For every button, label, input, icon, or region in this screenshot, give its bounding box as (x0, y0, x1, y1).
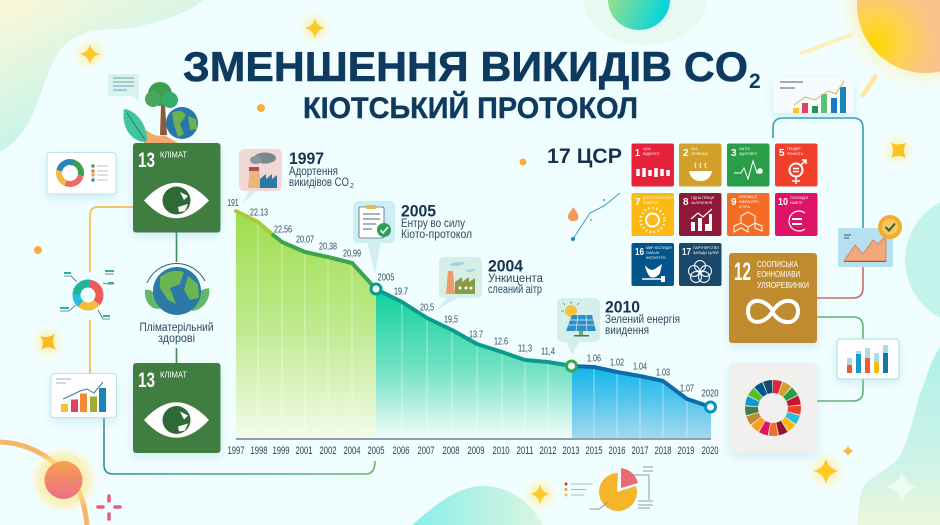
SDG tile 10 (775, 193, 818, 236)
SDG tile 3: ЗДОРОВ'Я (739, 152, 757, 156)
data value labels: 22,56 (274, 224, 292, 236)
description (401, 218, 472, 241)
SDG tile 10: НАВІТЕ (790, 201, 803, 205)
x axis labels: 2001 (296, 445, 312, 457)
card label: КЛІМАТ (160, 370, 187, 380)
icon: pie chart with legend (564, 467, 653, 511)
data value labels: 2020 (702, 388, 719, 400)
data value labels: 12.6 (494, 336, 508, 348)
data value labels: 19,5 (444, 314, 458, 326)
year: 2005 (401, 202, 436, 220)
data value labels: 20,5 (420, 302, 434, 314)
decorative blob: top left (0, 0, 203, 152)
SDG tile 2 (679, 144, 722, 186)
connector: green vertical (176, 232, 178, 363)
year: 2010 (605, 298, 640, 316)
globe caption: здорові (158, 333, 195, 345)
data value labels: 191 (228, 197, 239, 209)
SDG tile 5: РІВНІСТЬ (787, 152, 804, 156)
x axis labels: 2006 (392, 445, 410, 457)
SDG tile 8: ЗАЛУЧЕННЯ (691, 201, 713, 205)
area: green 1997-2005 (236, 211, 376, 438)
marker: 2005 (371, 284, 381, 294)
x axis labels (228, 445, 718, 457)
SDG tile 8: ГІДНА ПРАЦЯ (691, 196, 715, 200)
x axis labels: 2004 (344, 445, 360, 457)
description: Ентру во силу (401, 218, 465, 230)
connector: blue-green bottom (104, 417, 375, 474)
SDG tile 9: ІНФРАСТРУ- (739, 200, 761, 204)
SDG tile 9 (727, 193, 770, 236)
SDG tile 9: 9 (731, 197, 737, 208)
icon: eye with globe (144, 402, 209, 438)
data value labels: 1.06 (587, 352, 601, 364)
title: ЗМЕНШЕННЯ ВИКИДІВ CO (183, 43, 748, 90)
SDG tile 7: 7 (635, 197, 641, 208)
x axis labels: 2002 (320, 445, 336, 457)
x axis (236, 438, 711, 440)
SDG tile 9: ІННОВАЦІЇ (739, 195, 757, 199)
SDG tile 17 (679, 243, 722, 286)
panel: SDG wheel (729, 363, 817, 453)
SDG tile 5: 5 (779, 148, 785, 159)
year: 1997 (289, 149, 324, 168)
card: area chart with badge (838, 215, 902, 267)
line: teal (376, 289, 572, 366)
SDG tile 8 (679, 193, 722, 236)
x axis labels: 2008 (442, 445, 460, 457)
x axis labels: 2016 (608, 445, 626, 457)
SDG tile 17: 17 (682, 247, 691, 258)
line: green (236, 211, 272, 234)
description (289, 166, 354, 190)
marker: 2020 (706, 402, 716, 412)
area: teal 2005-2013 (376, 289, 572, 438)
icon: solar panel and sun (557, 298, 600, 355)
data value labels: 19.7 (394, 286, 408, 298)
description: Адортення (289, 166, 338, 178)
description: виидення (605, 325, 649, 337)
decorative blob: top centre (583, 0, 707, 45)
icon: factory with clean air (437, 257, 482, 310)
data value labels: 2005 (378, 272, 395, 284)
SDG tile 16: СИЛЬНІ (646, 251, 659, 255)
icon: document with check (353, 201, 395, 275)
description: 2 (350, 183, 354, 190)
panel: SDG grid (632, 144, 818, 286)
card label: КЛІМАТ (160, 150, 187, 160)
SDG tile 7: ДОСТУПНА ЕНЕРГІЯ (643, 196, 679, 200)
SDG tile 10: ОСКЛАДНІ (790, 196, 808, 200)
icon: check badge (878, 215, 902, 239)
card number: 12 (734, 258, 751, 286)
x axis labels: 2019 (678, 445, 694, 457)
callout: 1997 (239, 149, 354, 205)
panel: climate card bottom (133, 363, 220, 453)
SDG tile 3 (727, 144, 770, 186)
heading: 17 SDGs: 17 ЦСР (547, 145, 622, 168)
card: bar chart left (51, 374, 116, 418)
description: Зелений енергія (605, 314, 680, 326)
x axis labels: 2013 (562, 445, 580, 457)
data value labels: 1.04 (633, 360, 647, 372)
x axis labels: 2009 (468, 445, 484, 457)
description: Ункицента (488, 273, 544, 285)
icon: hand with tree, leaf and globe (124, 82, 198, 143)
SDG tile 2: 2 (683, 148, 689, 159)
description: слеаний аітр (488, 284, 542, 296)
connector: right red (817, 267, 863, 298)
decorative sun: bottom left (0, 442, 98, 525)
icon: donut with callouts (60, 271, 114, 319)
SDG tile 17: ЗАРАДИ ЦІЛЕЙ (693, 251, 719, 255)
marker: 2013 (566, 361, 576, 371)
SDG tile 5: ҐЕНДЕР (787, 146, 801, 151)
x axis labels: 2007 (418, 445, 434, 457)
description (488, 273, 544, 296)
title: 2 (749, 70, 761, 93)
globe caption (140, 322, 214, 345)
decorative blob: bottom centre (412, 486, 543, 525)
SDG tile 2: ЇЖА (691, 147, 698, 151)
area: blue 2013-2020 (572, 366, 711, 438)
data value labels: 1.03 (656, 366, 670, 378)
connector: right green (817, 317, 863, 401)
data value labels: 11,3 (518, 342, 532, 354)
x axis labels: 2015 (586, 445, 602, 457)
SDG tile 16: ІНСТИТУТИ (646, 256, 666, 260)
description: викидівов CO (289, 177, 349, 189)
icon: infinity loop (748, 301, 798, 322)
x axis labels: 1999 (272, 445, 290, 457)
data value labels: 13.7 (469, 328, 483, 340)
x axis labels: 2018 (654, 445, 672, 457)
SDG tile 1: 1 (635, 148, 640, 159)
decorative sun: top right (802, 0, 940, 95)
data value labels: 22.13 (250, 206, 268, 218)
icon: speech bubble (108, 74, 139, 101)
callout: 2005 (353, 201, 472, 275)
x axis labels: 1998 (250, 445, 268, 457)
SDG tile 8: 8 (683, 197, 689, 208)
description (605, 314, 680, 337)
area chart (228, 197, 719, 457)
card text: УЛЯОРЕВИНКИ (757, 280, 809, 290)
card text: СООПИСЬКА (757, 259, 798, 269)
SDG tile 16: МИР, ЮСТИЦІЯ (646, 246, 672, 250)
SDG tile 7 (632, 193, 679, 236)
SDG tile 1: БІДНОСТІ (643, 152, 659, 156)
SDG tile 1 (632, 144, 674, 186)
SDG tile 7: ЕНЕРГІЯ (643, 201, 658, 205)
globe caption: Пліматерільний (140, 322, 214, 334)
icon: globe with leaves (145, 263, 209, 315)
panel: SDG 12 card (729, 253, 817, 343)
card number: 13 (138, 369, 155, 392)
card text (757, 259, 809, 290)
subtitle: КІОТСЬКИЙ ПРОТОКОЛ (303, 91, 638, 125)
SDG tile 16: 16 (635, 247, 644, 258)
SDG tile 3: ЗАПОЇ (739, 147, 750, 151)
connector: orange (90, 207, 133, 373)
SDG tile 16 (632, 243, 674, 286)
card: bar chart top right (773, 78, 853, 113)
icon: eye with globe (144, 183, 209, 218)
callout: 2010 (557, 298, 680, 355)
callout: 2004 (437, 256, 544, 310)
icon: SDG colour wheel (743, 378, 803, 438)
SDG tile 1: ЦІЛЬ (643, 147, 652, 151)
SDG tile 3: 3 (731, 148, 737, 159)
data value labels: 20,99 (343, 248, 361, 260)
data value labels: 20,07 (296, 234, 314, 246)
x axis labels: 2012 (540, 445, 556, 457)
SDG tile 17: ПАРТНЕРСТВО (693, 246, 719, 250)
data value labels (228, 197, 719, 400)
SDG tile 10: 10 (778, 197, 788, 208)
x axis labels: 2020 (702, 445, 718, 457)
card: donut chart (47, 152, 116, 194)
x axis labels: 2010 (492, 445, 510, 457)
x axis labels: 2011 (516, 445, 534, 457)
panel: climate card top (133, 143, 220, 232)
card text: ЕОННОМІАВИ (757, 269, 800, 279)
card: bar chart right (837, 339, 899, 379)
line: blue (572, 366, 711, 407)
SDG tile 5 (775, 144, 818, 186)
icon: flame and trend line (568, 193, 620, 241)
SDG tile 9: КТУРА (739, 205, 751, 209)
data value labels: 11,4 (541, 346, 555, 358)
SDG tile 2: ЧЕРВОНА (691, 152, 708, 156)
decorative blob: right side (857, 195, 940, 525)
data value labels: 20,38 (319, 240, 337, 252)
x axis labels: 1997 (228, 445, 244, 457)
data value labels: 1.02 (610, 356, 624, 368)
icon: red sparkle marks (98, 496, 120, 519)
year: 2004 (488, 256, 523, 276)
description: Кіото-протокол (401, 229, 472, 241)
data value labels: 1.07 (680, 382, 694, 394)
x axis labels: 2017 (632, 445, 648, 457)
connector: right teal (773, 118, 863, 229)
card number: 13 (138, 149, 155, 172)
icon: factory with smoke (239, 149, 282, 205)
x axis labels: 2005 (368, 445, 384, 457)
